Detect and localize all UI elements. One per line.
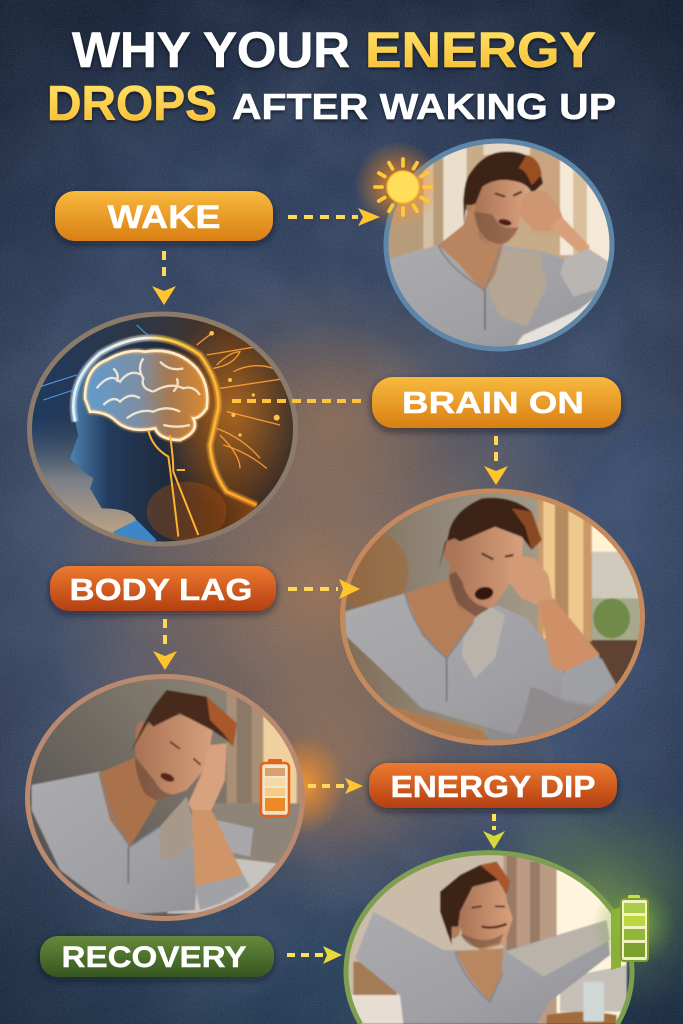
arrow: wake to photo — [288, 208, 380, 226]
icon: full battery — [592, 883, 676, 970]
arrow: recovery to photo — [287, 946, 342, 964]
arrow: battery to energy dip — [308, 778, 363, 794]
pill: body lag: BODY LAG — [70, 572, 252, 607]
pill: energy dip: ENERGY DIP — [390, 769, 596, 804]
title: AFTER WAKING UP — [232, 86, 616, 127]
arrow: energy dip down — [483, 814, 505, 849]
title: ENERGY — [365, 22, 596, 78]
pill: wake: WAKE — [108, 199, 220, 235]
arrow: wake to brain — [152, 251, 176, 305]
pill: wake — [55, 191, 273, 241]
title — [47, 22, 616, 131]
title: DROPS — [47, 77, 217, 131]
arrow: body lag down — [153, 619, 177, 670]
panel: wake photo — [380, 135, 613, 355]
pill: recovery: RECOVERY — [62, 941, 246, 974]
pill: body lag — [50, 566, 276, 611]
panel: recovery photo — [346, 852, 632, 1024]
pill: brain on — [372, 377, 621, 428]
arrow: body lag to photo — [288, 579, 360, 599]
icon: low battery — [261, 759, 289, 816]
panel: brain illustration — [27, 312, 310, 547]
pill: energy dip — [369, 763, 617, 808]
panel: yawning photo — [335, 488, 648, 745]
pill: recovery — [40, 936, 274, 977]
arrow: brain on to brain — [232, 399, 362, 403]
icon: sun — [354, 141, 442, 229]
panel: tired photo — [25, 674, 345, 921]
pill: brain on: BRAIN ON — [402, 385, 584, 420]
arrow: brain on down — [484, 436, 508, 485]
title: WHY YOUR — [72, 22, 350, 78]
